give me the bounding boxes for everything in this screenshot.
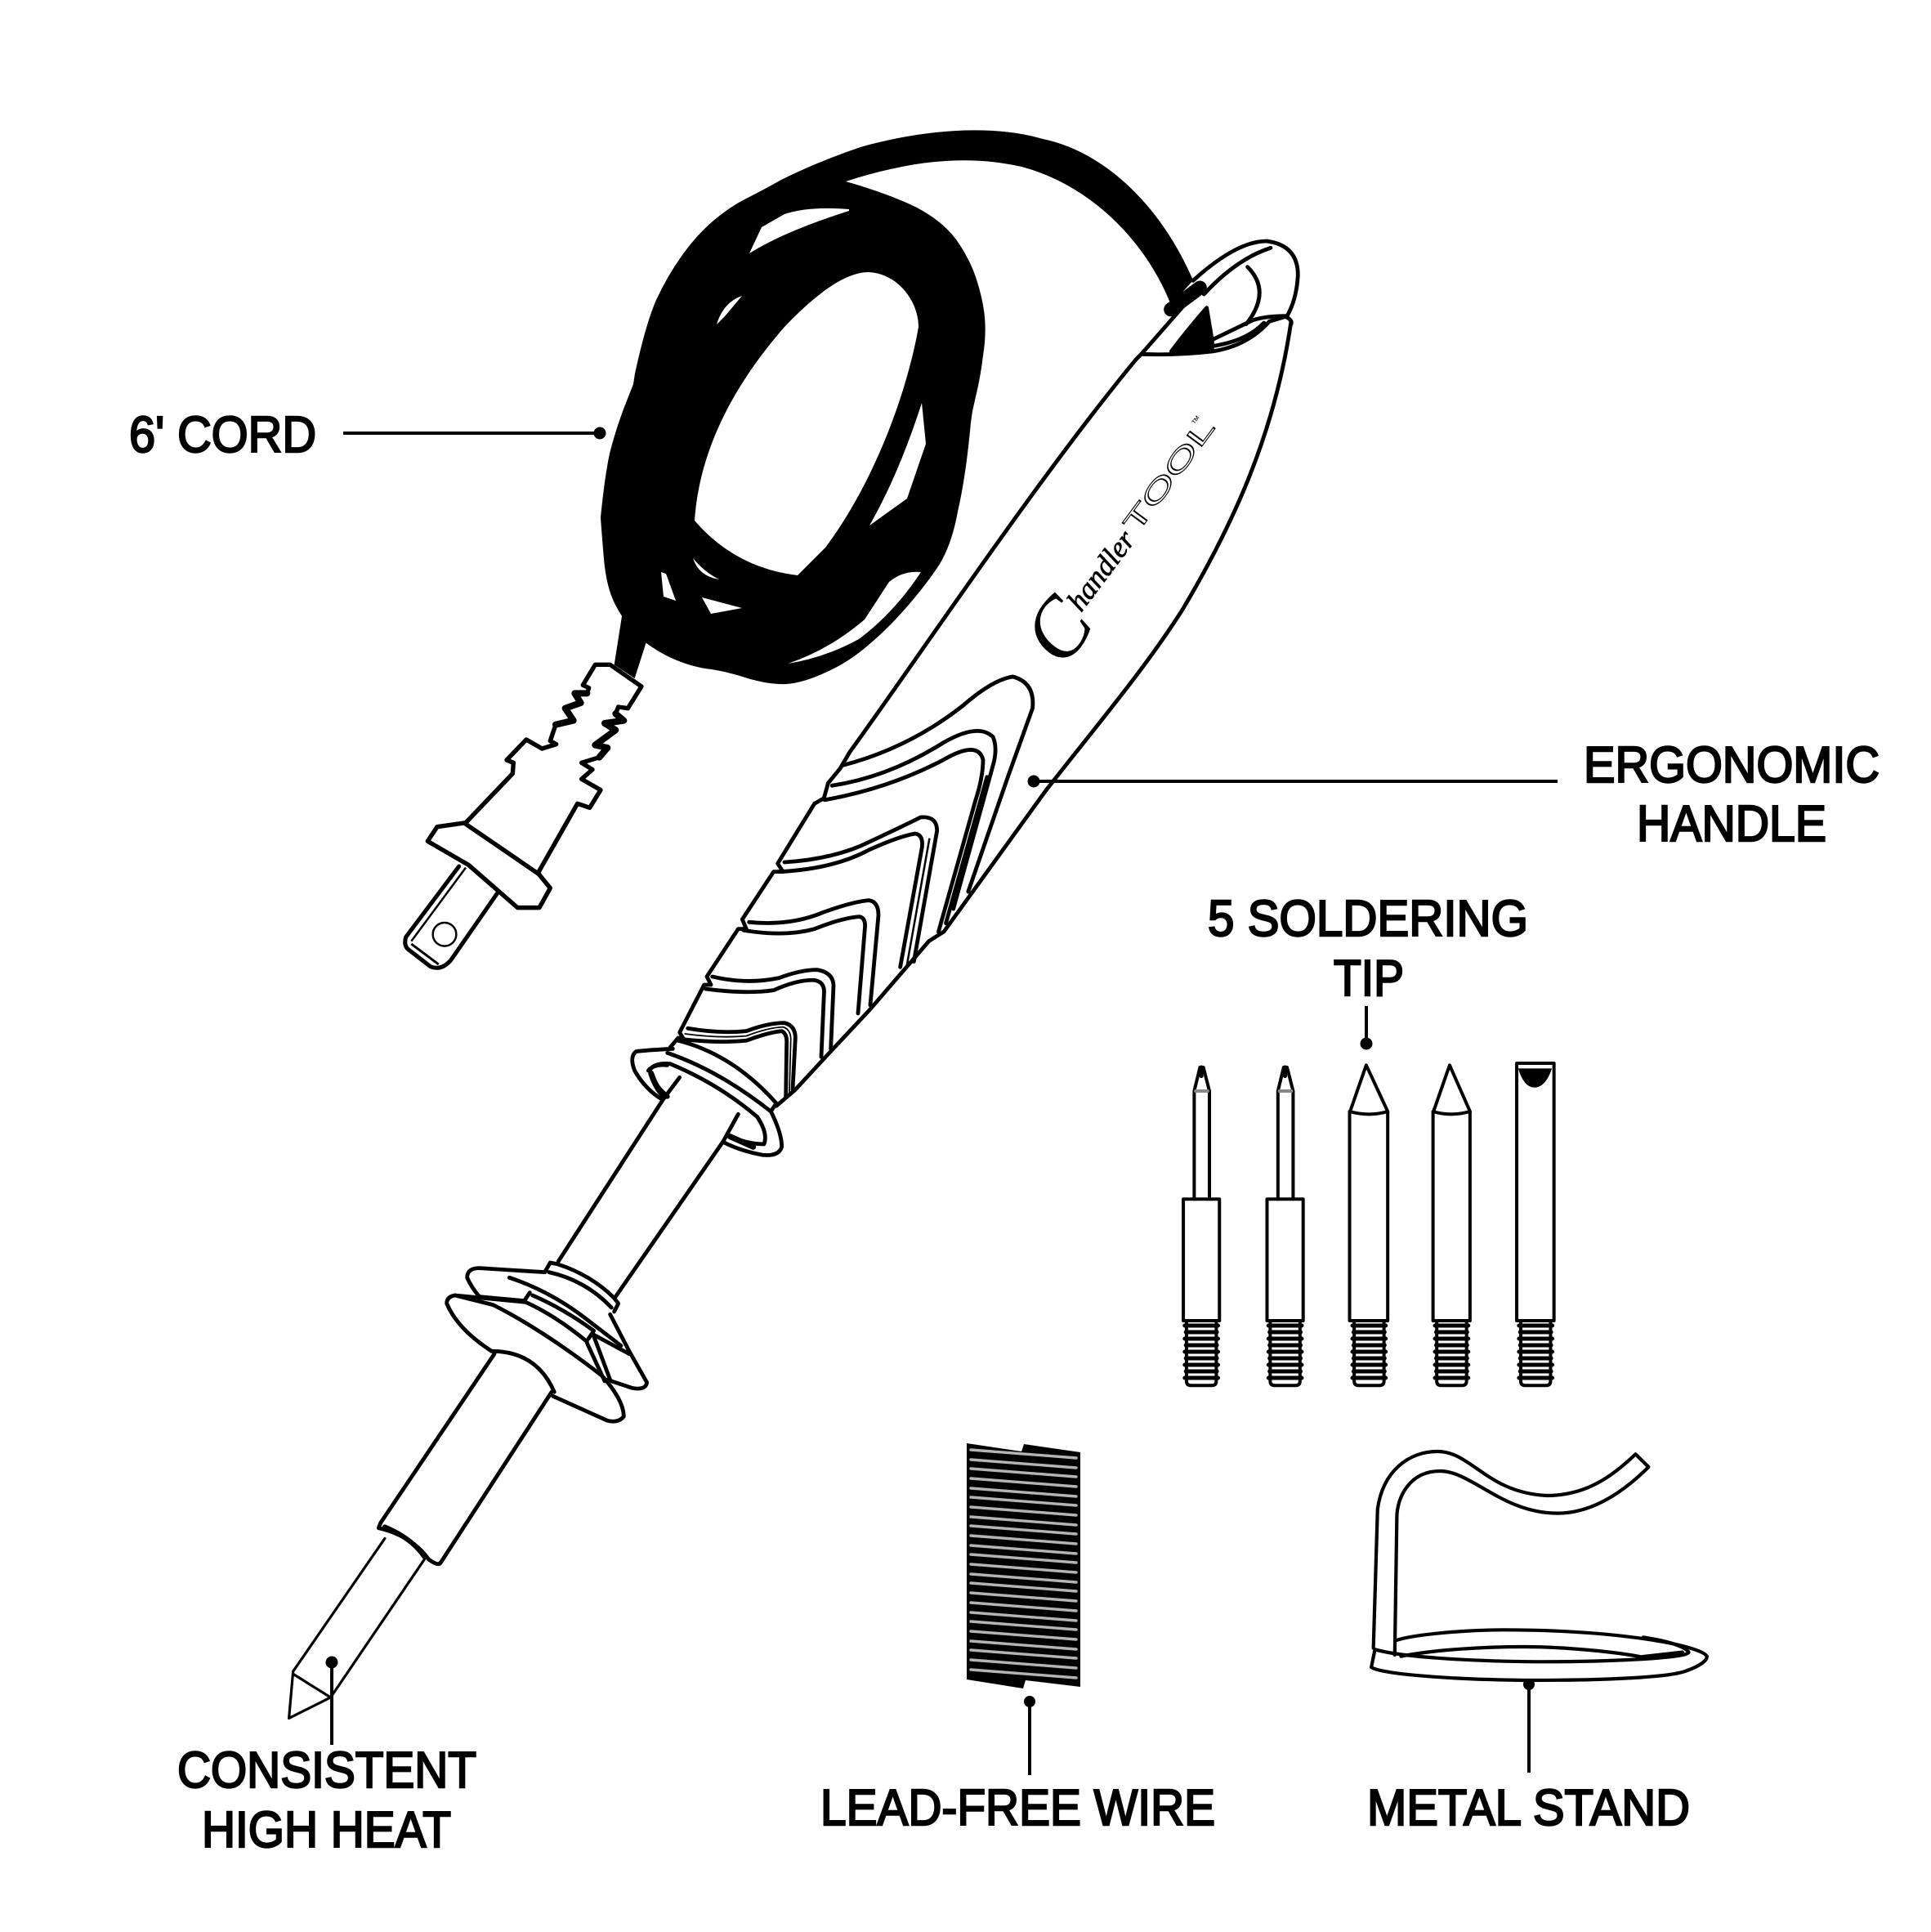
plug body [427, 664, 641, 908]
leader line [1028, 775, 1558, 788]
cord coil [601, 130, 1193, 684]
leader line [1523, 1679, 1535, 1773]
callout: metal stand [1367, 1679, 1690, 1836]
label [1584, 737, 1880, 852]
coil openings [661, 208, 926, 664]
tip 4 [1433, 1065, 1470, 1385]
label: ERGONOMIC [1584, 737, 1880, 794]
collar one left side [632, 1049, 673, 1099]
label: HIGH HEAT [202, 1802, 451, 1858]
label: TIP [1334, 950, 1404, 1007]
logo: Chandler TOOL: TOOL [1117, 413, 1221, 538]
callout: lead-free wire [820, 1696, 1215, 1836]
label: 5 SOLDERING [1208, 891, 1528, 947]
chevron grip bands [650, 752, 944, 1155]
top grip panel [825, 677, 1033, 932]
iron tip [289, 1538, 424, 1718]
collars and shaft [381, 1049, 738, 1562]
leader line [1360, 1006, 1373, 1049]
tip 2 [1267, 1067, 1303, 1385]
tip 3 [1350, 1065, 1388, 1385]
solder wire coil [967, 1443, 1080, 1688]
tip 5 [1517, 1063, 1554, 1385]
label: 6' CORD [129, 407, 316, 463]
collar two [447, 1263, 647, 1421]
leader line [1024, 1696, 1035, 1775]
label [177, 1742, 476, 1858]
lower shaft end and tip [289, 1523, 441, 1718]
collar one right side [650, 1040, 782, 1155]
label: METAL STAND [1367, 1780, 1690, 1836]
handle end loop [1136, 241, 1298, 360]
callout: 5 soldering tip [1208, 891, 1528, 1049]
leader line [325, 1656, 338, 1745]
leader line [343, 427, 606, 440]
tip 1 [1183, 1067, 1219, 1385]
soldering tips set [1183, 1063, 1554, 1385]
plug blade [405, 866, 497, 968]
logo: Chandler TOOL: C [1004, 579, 1112, 681]
label: HANDLE [1637, 796, 1826, 852]
logo: Chandler TOOL: handler [1060, 524, 1142, 617]
soldering iron handle [650, 241, 1298, 1155]
logo: Chandler TOOL: ™ [1189, 414, 1205, 428]
label [1208, 891, 1528, 1007]
logo: Chandler TOOL [1004, 413, 1221, 681]
plug grip ridges [556, 693, 624, 758]
label: LEAD-FREE WIRE [820, 1780, 1215, 1836]
callout: 6' cord [129, 407, 606, 463]
callout: ergonomic handle [1028, 737, 1880, 852]
label: CONSISTENT [177, 1742, 476, 1799]
callout: consistent high heat [177, 1656, 476, 1858]
metal stand [1371, 1451, 1707, 1680]
plug [405, 613, 656, 968]
